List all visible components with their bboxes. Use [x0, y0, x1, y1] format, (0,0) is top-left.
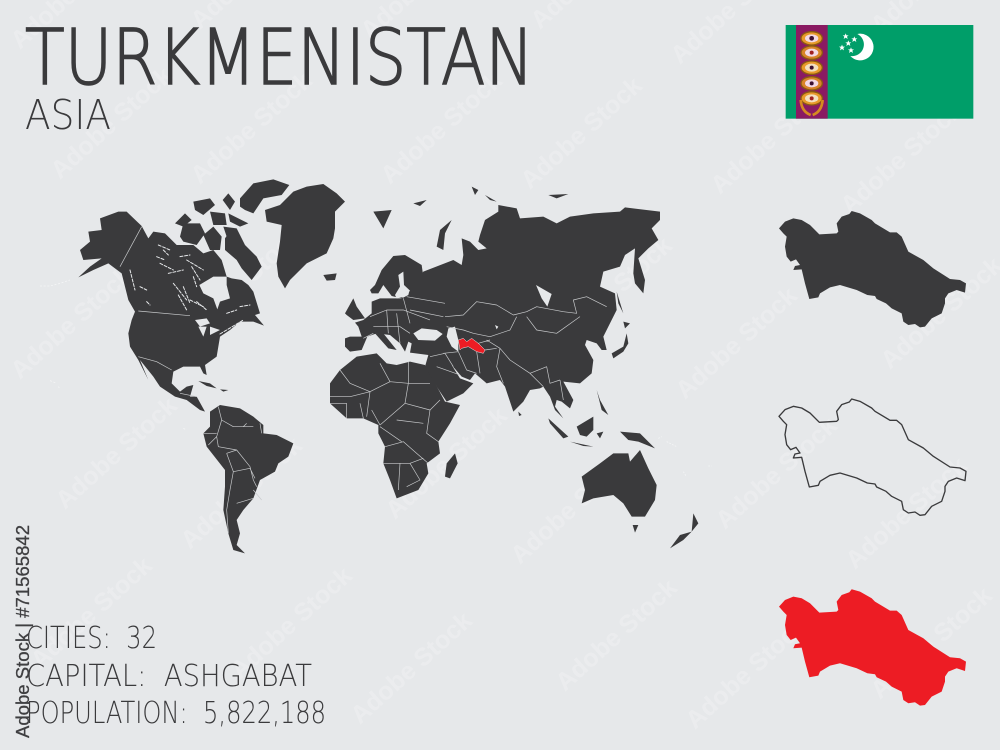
watermark pattern: Adobe Stock [505, 446, 638, 569]
Arctic islands [175, 179, 289, 280]
watermark pattern: Adobe Stock [175, 221, 308, 344]
Americas borders [120, 227, 262, 533]
cities: CITIES: 32 [26, 621, 157, 656]
Old World borders [330, 297, 607, 490]
Eurasia [345, 205, 660, 418]
watermark pattern: Adobe Stock [345, 606, 478, 729]
world map [40, 179, 712, 553]
South America [203, 405, 293, 553]
watermark pattern: Adobe Stock [175, 431, 308, 554]
watermark pattern: Adobe Stock [670, 281, 803, 404]
map: Eurasia, Africa, Australia [330, 187, 712, 548]
flag of Turkmenistan [786, 25, 973, 119]
North America [78, 212, 264, 412]
Turkmenistan silhouette: red [779, 589, 966, 706]
capital: CAPITAL: ASHGABAT [26, 659, 312, 694]
title: TURKMENISTAN [25, 14, 534, 103]
watermark pattern: Adobe Stock [45, 61, 178, 184]
subtitle: ASIA [25, 91, 111, 139]
watermark pattern: Adobe Stock [185, 66, 318, 189]
Arctic and other islands [345, 187, 698, 548]
watermark pattern: Adobe Stock [545, 231, 678, 354]
watermark pattern: Adobe Stock [5, 261, 138, 384]
watermark pattern: Adobe Stock [705, 76, 838, 199]
stock id vertical label: Adobe Stock | #71565842 [13, 525, 33, 738]
Africa [330, 353, 460, 498]
watermark pattern: Adobe Stock [550, 573, 683, 696]
watermark pattern: Adobe Stock [515, 71, 648, 194]
watermark pattern: Adobe Stock [680, 611, 813, 734]
Scandinavia [370, 255, 423, 298]
Italy [375, 333, 397, 350]
Hudson Bay and Great Lakes [199, 277, 230, 309]
stats text [26, 621, 326, 731]
Turkmenistan silhouette: outline [779, 399, 966, 515]
Turkmenistan highlighted on map [458, 338, 485, 353]
Greenland [265, 184, 345, 288]
crescent and stars [850, 34, 874, 60]
watermark pattern: Adobe Stock [865, 581, 998, 704]
Cuba and Hispaniola [198, 381, 228, 392]
watermark pattern: Adobe Stock [380, 401, 513, 524]
watermark pattern: Adobe Stock [375, 66, 508, 189]
Iceland [323, 273, 337, 281]
Madagascar [445, 453, 458, 478]
Pacific island specks [658, 437, 712, 476]
watermark pattern: Adobe Stock [840, 451, 973, 574]
watermark pattern: Adobe Stock [25, 551, 158, 674]
Aleutians and Pacific specks [40, 280, 187, 430]
map: Americas and Greenland [40, 179, 345, 553]
watermark pattern: Adobe Stock [835, 96, 968, 219]
watermark pattern: Adobe Stock [50, 391, 183, 514]
population: POPULATION: 5,822,188 [26, 696, 326, 731]
watermark pattern: Adobe Stock [415, 221, 548, 344]
Turkmenistan silhouette: dark [779, 211, 966, 327]
watermark pattern: Adobe Stock [225, 561, 358, 684]
carpet guls [801, 32, 822, 105]
watermark pattern: Adobe Stock [710, 411, 843, 534]
Seas and lakes [395, 272, 552, 352]
